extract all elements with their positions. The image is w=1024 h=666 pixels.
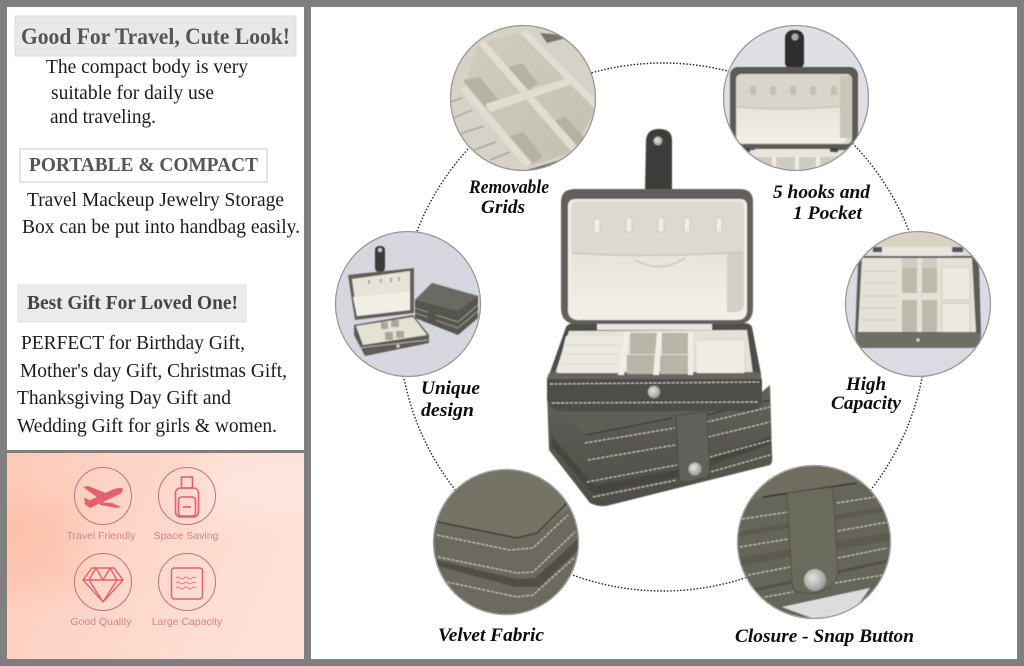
caption: high capacity: Capacity bbox=[831, 393, 902, 414]
caption: unique design: Unique bbox=[421, 378, 481, 399]
icon: suitcase bbox=[158, 468, 216, 524]
text block: perfect for gifts: Wedding Gift for girls & women. bbox=[17, 415, 277, 437]
text block: compact body: The compact body is very bbox=[46, 56, 248, 78]
panel: text column bbox=[7, 7, 304, 450]
heading: good for travel: Good For Travel, Cute Look! bbox=[21, 24, 290, 49]
text block: perfect for gifts: Thanksgiving Day Gift and bbox=[17, 387, 231, 409]
photo: velvet fabric bbox=[432, 468, 580, 616]
open lid bbox=[561, 189, 753, 324]
heading: good for travel bbox=[15, 16, 296, 56]
text block: perfect for gifts bbox=[17, 332, 287, 437]
heading: portable and compact bbox=[20, 149, 267, 182]
panel: peach feature icons bbox=[0, 453, 310, 659]
text block: perfect for gifts: Mother's day Gift, Christmas Gift, bbox=[20, 360, 287, 382]
open tray bbox=[547, 323, 762, 411]
caption: five hooks and one pocket: 1 Pocket bbox=[793, 203, 863, 224]
label: good quality: Good Quality bbox=[70, 616, 132, 628]
caption: unique design bbox=[421, 378, 481, 421]
photo: hooks and pocket bbox=[723, 25, 869, 172]
photo: removable grids bbox=[450, 25, 600, 172]
label: space saving: Space Saving bbox=[154, 530, 219, 542]
caption: removable grids bbox=[468, 177, 550, 218]
photo: snap button closure bbox=[735, 465, 895, 620]
heading: best gift: Best Gift For Loved One! bbox=[27, 293, 238, 314]
label: travel friendly: Travel Friendly bbox=[66, 530, 136, 542]
text block: compact body bbox=[46, 56, 248, 128]
icon: airplane bbox=[74, 468, 132, 524]
hinge bbox=[597, 318, 712, 330]
icon: diamond bbox=[74, 554, 132, 610]
caption: high capacity: High bbox=[845, 374, 886, 395]
photo: high capacity bbox=[845, 231, 991, 377]
caption: five hooks and one pocket bbox=[773, 182, 871, 224]
photo: main jewelry box bbox=[547, 129, 772, 506]
photo: unique design bbox=[335, 231, 481, 377]
label: large capacity: Large Capacity bbox=[152, 616, 223, 628]
text block: compact body: and traveling. bbox=[50, 106, 156, 128]
strap with snap bbox=[676, 412, 710, 482]
text block: storage box bbox=[22, 189, 300, 238]
text block: storage box: Travel Mackeup Jewelry Storage bbox=[27, 189, 284, 211]
heading: portable and compact: PORTABLE & COMPACT bbox=[29, 154, 259, 176]
icon: fabric square bbox=[158, 554, 216, 610]
heading: best gift bbox=[18, 285, 246, 322]
text block: storage box: Box can be put into handbag easily. bbox=[22, 216, 300, 238]
dotted ring bbox=[399, 63, 927, 591]
lid strap bbox=[645, 129, 672, 190]
caption: velvet fabric: Velvet Fabric bbox=[438, 625, 545, 646]
caption: high capacity bbox=[831, 374, 902, 414]
caption: removable grids: Grids bbox=[481, 197, 525, 218]
caption: removable grids: Removable bbox=[468, 177, 550, 198]
text block: perfect for gifts: PERFECT for Birthday Gift, bbox=[21, 332, 245, 354]
panel: product features bbox=[311, 7, 1017, 659]
lower closed box bbox=[547, 385, 772, 506]
caption: closure snap button: Closure - Snap Button bbox=[735, 626, 914, 647]
text block: compact body: suitable for daily use bbox=[51, 82, 214, 104]
caption: five hooks and one pocket: 5 hooks and bbox=[773, 182, 871, 203]
caption: unique design: design bbox=[421, 400, 474, 421]
